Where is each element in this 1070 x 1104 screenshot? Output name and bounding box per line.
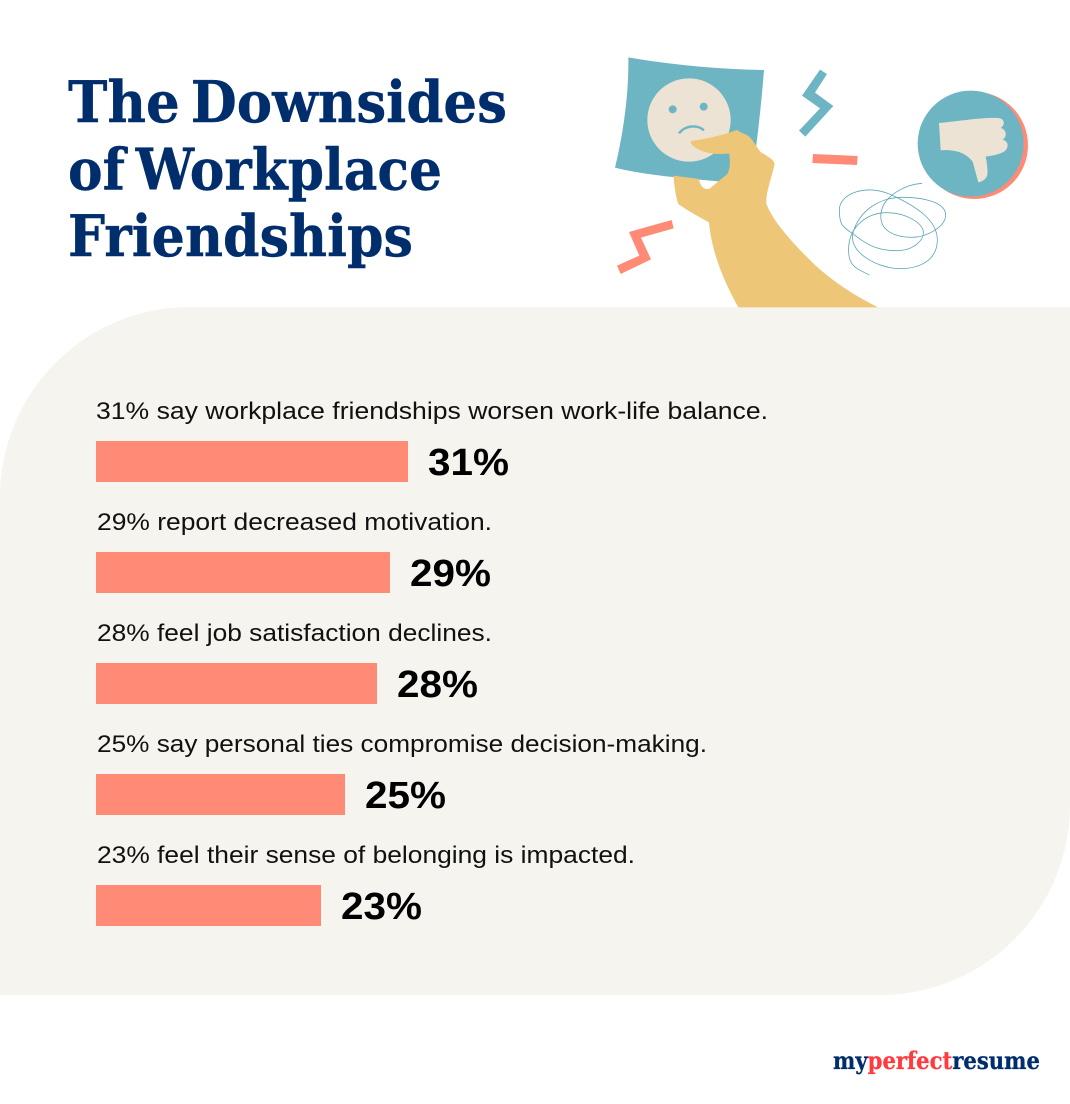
illustration xyxy=(615,57,1028,307)
icon: coral dash xyxy=(812,154,858,165)
row 2: 29% xyxy=(410,553,491,595)
title xyxy=(68,69,507,270)
row 4 xyxy=(96,731,707,817)
row 1 xyxy=(96,398,768,484)
panel: background xyxy=(0,307,1070,995)
icon: teal zigzag xyxy=(799,70,833,137)
row 4: 25% xyxy=(365,775,446,817)
title: Friendships xyxy=(68,203,413,270)
icon: scribble xyxy=(839,183,946,275)
icon: coral zigzag xyxy=(617,220,674,274)
row 3: 28% feel job satisfaction declines. xyxy=(97,620,492,647)
icon: thumbs down badge xyxy=(918,91,1028,199)
row 4: 25% say personal ties compromise decision-making. xyxy=(97,731,707,758)
title: The Downsides xyxy=(68,69,507,136)
row 1: 31% say workplace friendships worsen work-life balance. xyxy=(96,398,768,425)
logo: myperfectresume xyxy=(833,1046,1040,1075)
row 3: 28% xyxy=(397,664,478,706)
icon: sad face note xyxy=(615,57,764,181)
row 5: 23% xyxy=(341,886,422,928)
row 3 xyxy=(96,620,492,706)
row 2 xyxy=(96,509,492,595)
icon: arm and hand xyxy=(673,130,878,307)
row 2: 29% report decreased motivation. xyxy=(97,509,492,536)
row 1: 31% xyxy=(428,442,509,484)
row 5: 23% feel their sense of belonging is impacted. xyxy=(97,842,635,869)
title: of Workplace xyxy=(68,136,442,204)
row 5 xyxy=(96,842,635,928)
